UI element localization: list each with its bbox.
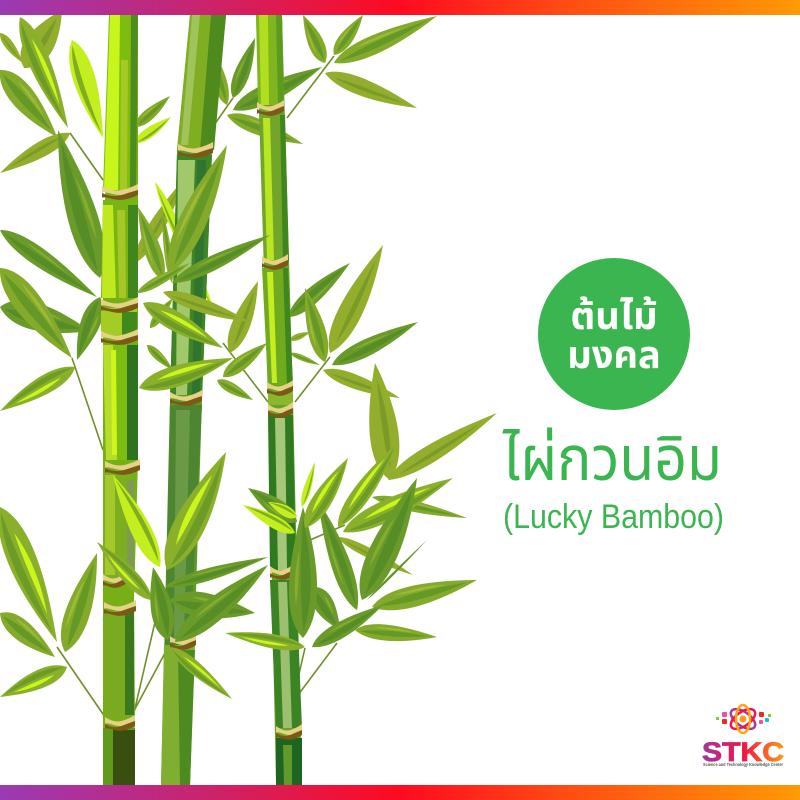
bottom gradient bar [0, 785, 800, 800]
right leaves: lower cluster [224, 361, 502, 654]
badge: green circle with heading [538, 258, 690, 410]
stems and branches [57, 56, 345, 723]
left leaves [0, 2, 174, 705]
title: Thai plant name: ไผ่กวนอิม [502, 425, 722, 494]
logo: STKC: Science and Technology Knowledge Center [703, 762, 783, 767]
stalk A [101, 15, 140, 785]
front leaves: lower centre cluster [91, 445, 276, 704]
back leaves: upper right cluster [201, 7, 441, 151]
badge: green circle with heading: ต้นไม้ [570, 296, 658, 338]
right leaves: middle cluster [296, 240, 422, 405]
stalk C [256, 15, 302, 785]
front leaves: centre cluster [130, 139, 273, 398]
badge: green circle with heading: มงคล [567, 335, 661, 377]
back leaves: centre cluster [128, 174, 355, 405]
stalk B [161, 15, 226, 785]
logo: STKC: STKC [702, 737, 784, 767]
top gradient bar [0, 0, 800, 15]
